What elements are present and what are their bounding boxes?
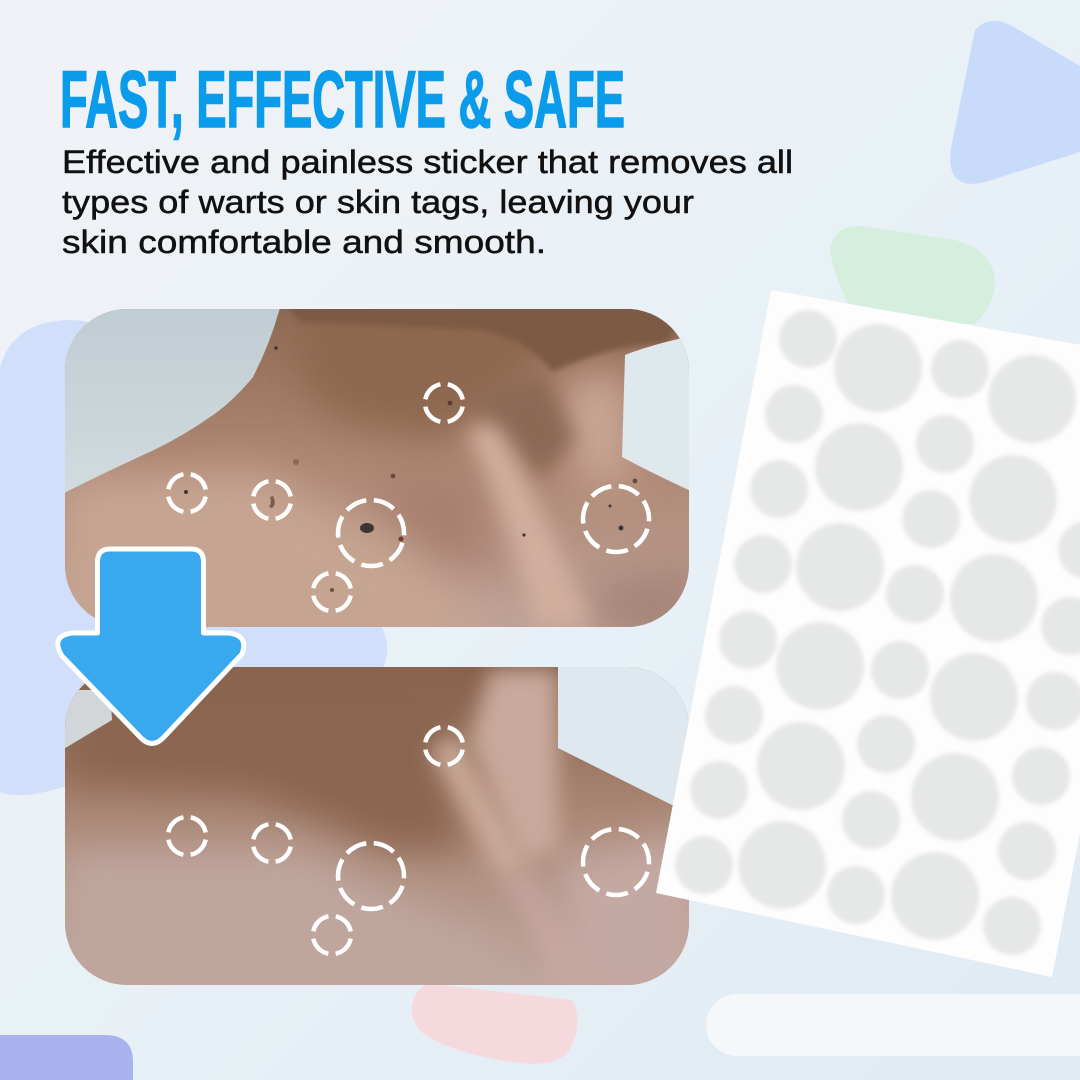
neck tendon highlight bbox=[430, 735, 530, 880]
jaw shadow bbox=[288, 309, 676, 373]
decorative shape: purple corner bbox=[0, 1035, 133, 1080]
background wall right bbox=[558, 667, 688, 806]
photo: before, neck with warts bbox=[60, 300, 700, 640]
dashed rings: after bbox=[168, 727, 649, 954]
background wall left bbox=[65, 690, 112, 748]
description text: Effective and painless sticker that removes all bbox=[62, 144, 793, 180]
decorative shape: pink blob bbox=[412, 984, 578, 1064]
description text: types of warts or skin tags, leaving your bbox=[62, 184, 694, 220]
description text: skin comfortable and smooth. bbox=[62, 224, 546, 260]
arrow: down bbox=[58, 549, 244, 744]
neck pink area bbox=[470, 670, 558, 860]
photo: after, clear skin bbox=[60, 660, 700, 1000]
title: FAST, EFFECTIVE & SAFE bbox=[60, 55, 625, 145]
background wall right bbox=[622, 338, 689, 490]
neck tendon highlight bbox=[465, 425, 590, 625]
decorative shape: blue triangle top right bbox=[950, 21, 1080, 184]
decorative shape: white pill bbox=[706, 994, 1080, 1056]
stickers bbox=[675, 310, 1080, 955]
dark wedge beside the neck tendon bbox=[484, 378, 582, 480]
background wall left bbox=[60, 300, 282, 495]
sticker sheet bbox=[656, 290, 1080, 977]
dashed rings: before bbox=[168, 384, 649, 611]
warts bbox=[184, 346, 637, 592]
description text bbox=[62, 144, 793, 260]
decorative shape: green blob bbox=[830, 226, 995, 324]
decorative shape: blue rounded triangle left bbox=[0, 320, 387, 795]
